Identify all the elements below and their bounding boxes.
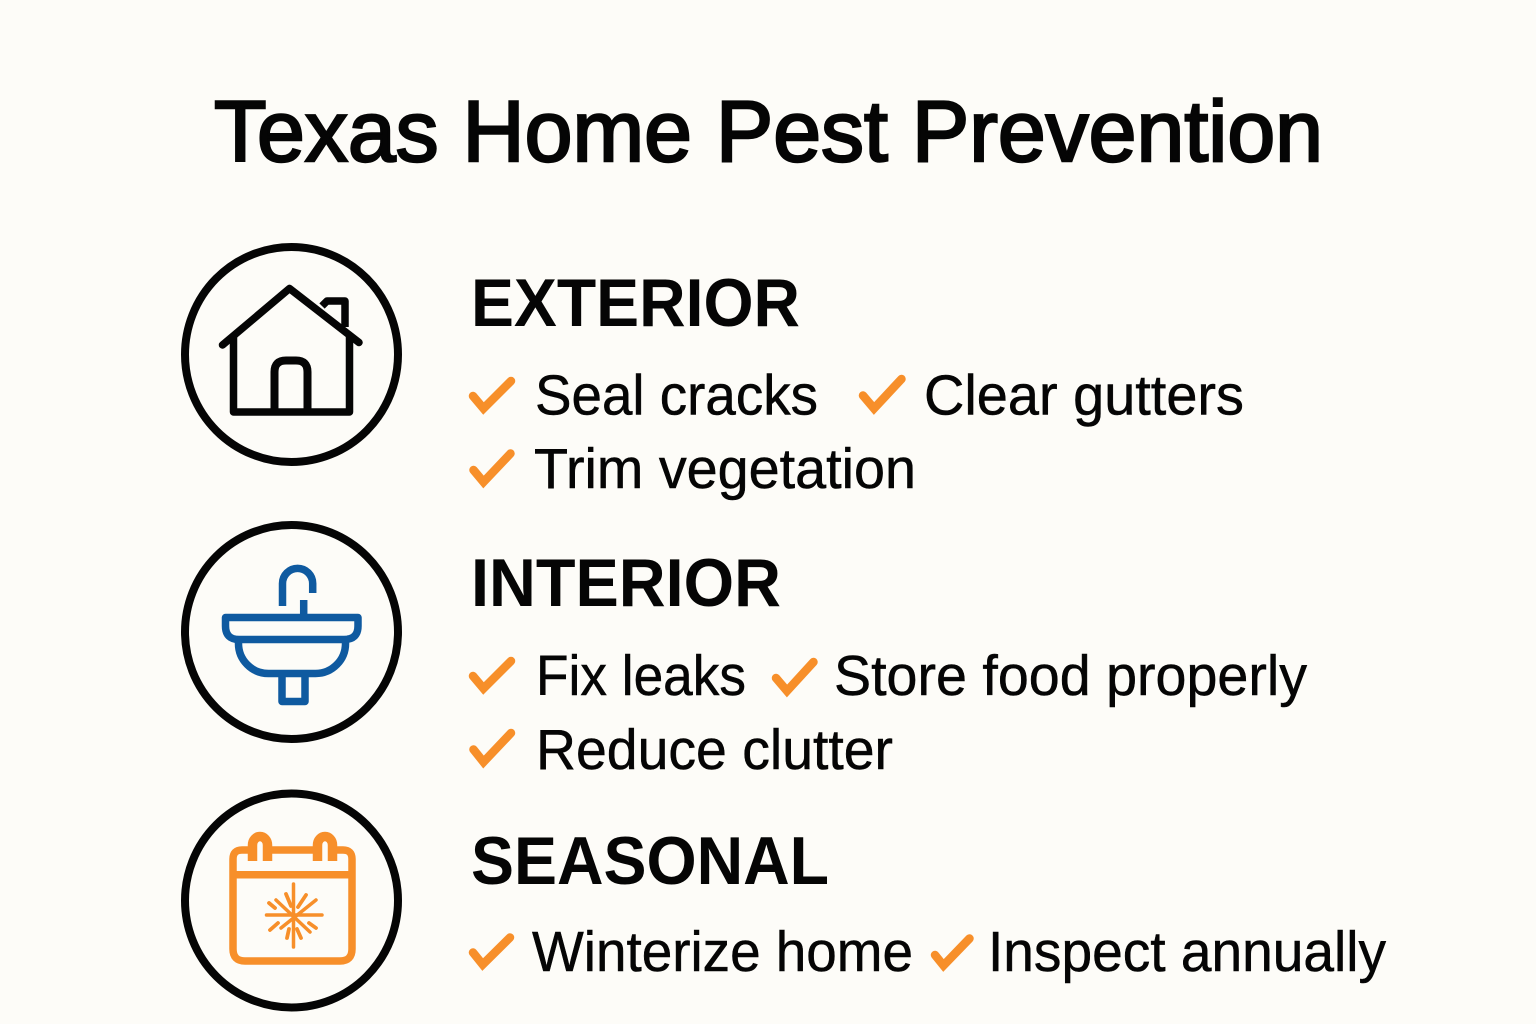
check item: fix leaks: Fix leaks [536, 644, 746, 708]
heading: exterior: EXTERIOR [471, 265, 800, 341]
icon: house in circle [185, 247, 398, 462]
check item: seal cracks: Seal cracks [535, 364, 818, 428]
check item: inspect annually: Inspect annually [988, 920, 1386, 984]
heading: interior: INTERIOR [471, 545, 781, 621]
icon: snowflake burst [266, 884, 322, 947]
panel: interior [185, 525, 1307, 782]
check item: trim vegetation: Trim vegetation [534, 437, 916, 501]
check item: winterize home: Winterize home [532, 920, 913, 984]
check item: reduce clutter: Reduce clutter [536, 718, 893, 782]
icon: sink in circle [185, 525, 398, 739]
check item: store food properly: Store food properly [834, 644, 1307, 708]
title: Texas Home Pest Prevention [214, 84, 1323, 180]
check item: clear gutters: Clear gutters [924, 364, 1244, 428]
panel: seasonal [185, 794, 1386, 1008]
icon: calendar in circle [185, 794, 398, 1008]
panel: exterior [185, 247, 1244, 501]
heading: seasonal: SEASONAL [471, 823, 829, 899]
